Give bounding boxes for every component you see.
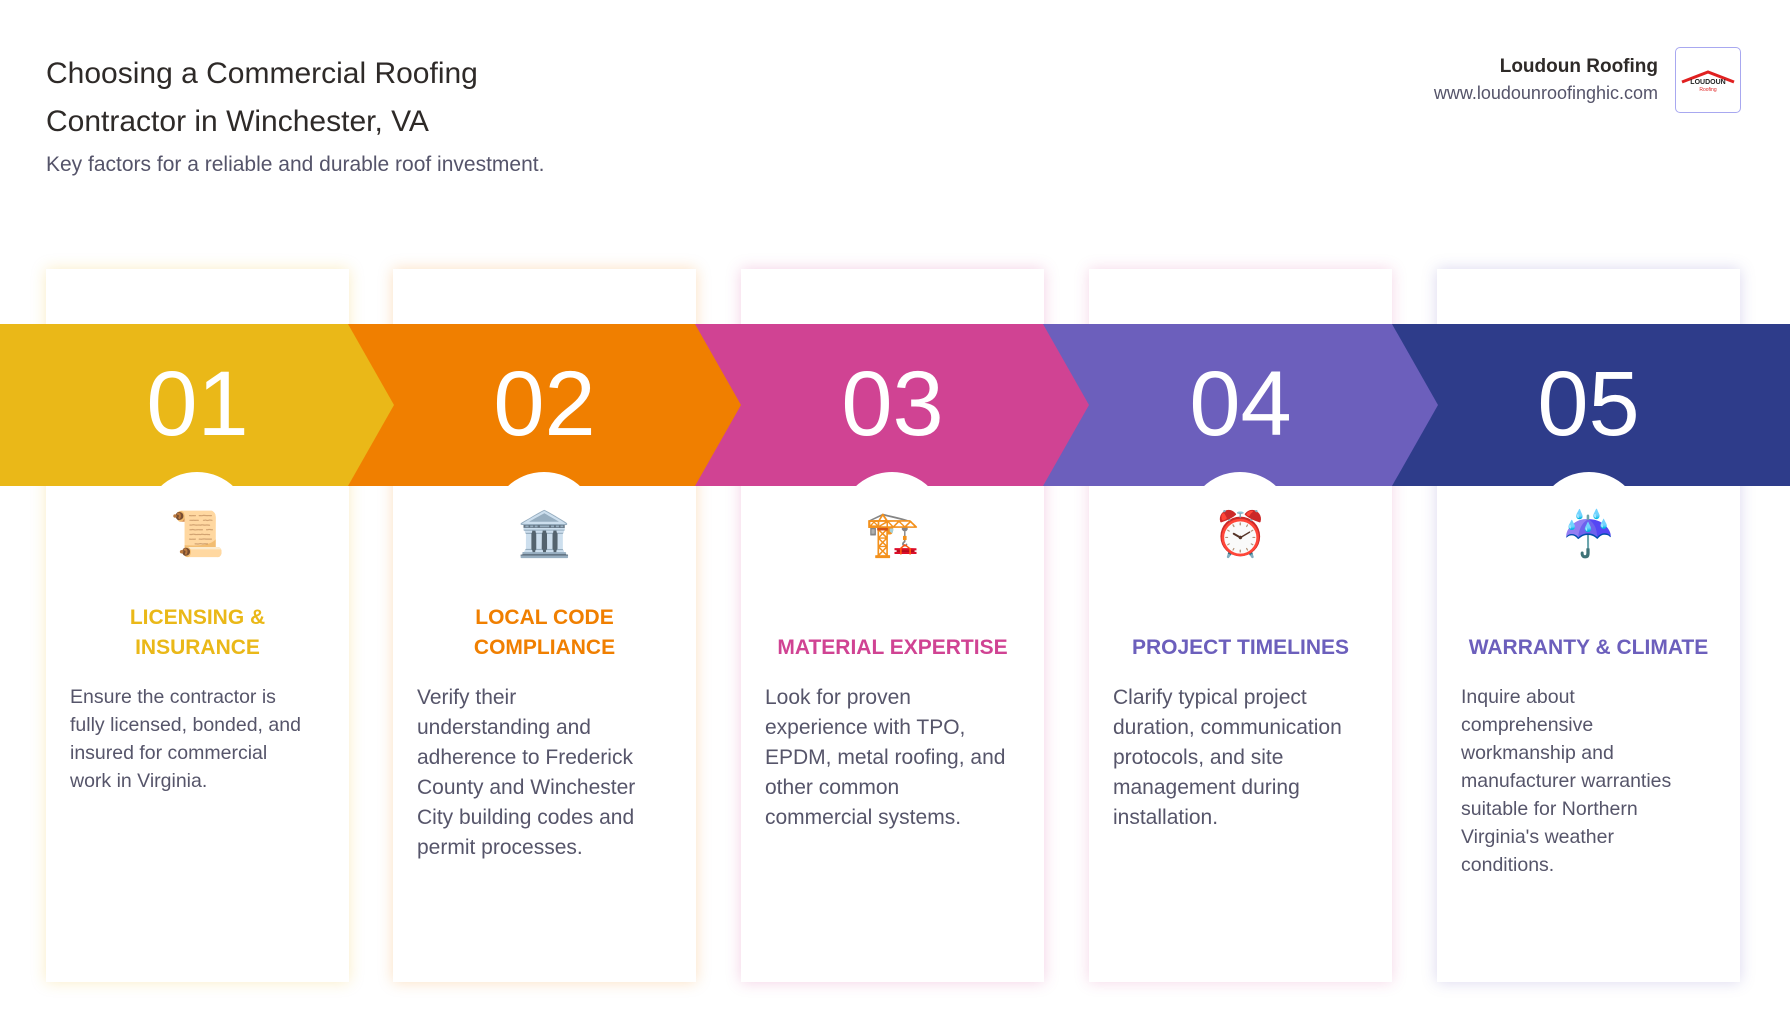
text block: experience with TPO, <box>765 716 965 739</box>
text block: Inquire about comprehensive workmanship and manufacturer warranties suitable for Northern Virginia's weather conditions. <box>1461 686 1671 876</box>
heading: LICENSING & <box>130 606 265 629</box>
subtitle: Key factors for a reliable and durable roof investment. <box>46 153 544 176</box>
number 04: 04 <box>1189 353 1292 455</box>
text block: other common <box>765 776 899 799</box>
card 1 <box>46 269 349 982</box>
panel: project timelines <box>1113 510 1349 829</box>
panel: licensing & insurance <box>70 510 301 792</box>
text block: Look for proven <box>765 686 911 709</box>
icon: alarm clock: ⏰ <box>1213 510 1268 559</box>
card 3 <box>741 269 1044 982</box>
heading <box>130 606 265 659</box>
panel: material expertise <box>765 510 1008 829</box>
icon: scroll: 📜 <box>170 510 225 559</box>
heading: LOCAL CODE <box>475 606 614 629</box>
heading: MATERIAL EXPERTISE <box>777 636 1008 659</box>
text block: EPDM, metal roofing, and <box>765 746 1005 769</box>
title <box>46 57 478 138</box>
panel: warranty & climate <box>1461 508 1708 876</box>
heading <box>474 606 615 659</box>
title: Choosing a Commercial Roofing <box>46 57 478 90</box>
heading: INSURANCE <box>135 636 260 659</box>
text block <box>765 686 1005 829</box>
logo: LOUDOUN <box>1690 79 1726 86</box>
number 05: 05 <box>1537 353 1640 455</box>
brand block <box>1434 47 1741 113</box>
brand url: www.loudounroofinghic.com <box>1434 83 1658 103</box>
icon: classical building: 🏛️ <box>517 510 572 559</box>
heading: PROJECT TIMELINES <box>1132 636 1349 659</box>
logo: Roofing <box>1699 87 1717 93</box>
title: Contractor in Winchester, VA <box>46 105 429 138</box>
icon: umbrella with rain: ☔ <box>1561 510 1616 559</box>
text block: Verify their understanding and adherence to Frederick County and Winchester City building codes and permit processes. <box>417 686 635 859</box>
logo <box>1675 47 1741 113</box>
chevron band <box>0 324 1790 486</box>
card 5 <box>1437 269 1740 982</box>
text block: Clarify typical project duration, communication protocols, and site management during installation. <box>1113 686 1342 829</box>
number 03: 03 <box>841 353 944 455</box>
heading: WARRANTY & CLIMATE <box>1469 636 1708 659</box>
text block: commercial systems. <box>765 806 961 829</box>
heading: COMPLIANCE <box>474 636 615 659</box>
brand name: Loudoun Roofing <box>1500 56 1658 77</box>
number 01: 01 <box>146 353 249 455</box>
number 02: 02 <box>493 353 596 455</box>
card 4 <box>1089 269 1392 982</box>
panel: local code compliance <box>417 510 635 859</box>
icon: crane: 🏗️ <box>865 510 920 559</box>
text block: Ensure the contractor is fully licensed, bonded, and insured for commercial work in Virginia. <box>70 686 301 792</box>
card 2 <box>393 269 696 982</box>
